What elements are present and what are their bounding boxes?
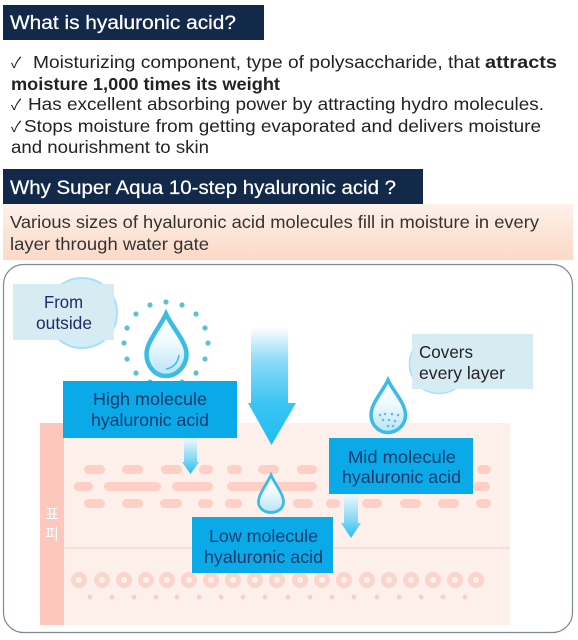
label: mid molecule [329, 438, 473, 494]
label: high molecule: High molecule [93, 389, 207, 409]
dermis dots [88, 595, 467, 599]
heading: what is hyaluronic acid: What is hyaluronic acid? [10, 13, 236, 34]
skin layers [40, 423, 510, 625]
epidermis cell dashes [74, 465, 491, 508]
label: low molecule: hyaluronic acid [204, 547, 323, 567]
text block: definition bullets: attracts [485, 52, 557, 72]
label: low molecule: Low molecule [209, 526, 318, 546]
callout: water gate statement: Various sizes of hyaluronic acid molecules fill in moisture in every [10, 212, 539, 232]
label: high molecule [63, 381, 237, 438]
panel: skin diagram [4, 264, 572, 632]
callout: water gate statement: layer through water gate [10, 234, 209, 254]
arrow: high molecule down [182, 438, 199, 474]
skin layers: 피 [45, 526, 59, 543]
text block: definition bullets: ✓ [11, 119, 22, 136]
text block: definition bullets: Moisturizing component, type of polysaccharide, that [33, 52, 480, 72]
heading: why super aqua [3, 169, 423, 204]
heading: what is hyaluronic acid [3, 5, 264, 40]
arrow: large incoming moisture [248, 327, 296, 445]
arrow: mid molecule down [341, 494, 361, 538]
text block: definition bullets: moisture 1,000 times its weight [11, 74, 280, 94]
icon: mid molecule drop [371, 380, 406, 432]
text block: definition bullets [11, 52, 557, 157]
text block: definition bullets: ✓ [11, 55, 22, 72]
label: high molecule: hyaluronic acid [91, 410, 209, 430]
heading: why super aqua: Why Super Aqua 10-step hyaluronic acid ? [10, 178, 396, 199]
text block: definition bullets: and nourishment to skin [11, 137, 209, 157]
label: covers every layer [412, 334, 533, 389]
circle behind from outside [47, 278, 117, 348]
label: covers every layer: Covers [419, 342, 473, 362]
text block: definition bullets: Has excellent absorbing power by attracting hydro molecules. [28, 94, 544, 114]
label: from outside: outside [36, 313, 92, 333]
circle behind covers [410, 334, 468, 394]
text block: definition bullets: Stops moisture from getting evaporated and delivers moisture [24, 116, 541, 136]
label: mid molecule: hyaluronic acid [342, 467, 461, 487]
label: covers every layer: every layer [419, 363, 505, 383]
text block: definition bullets: ✓ [11, 97, 22, 114]
label: low molecule [192, 517, 333, 573]
label: mid molecule: Mid molecule [348, 447, 456, 467]
icon: large water drop with dots [121, 299, 211, 385]
dermis cell rings [74, 574, 482, 586]
skin layers: 표 [45, 506, 59, 523]
label: from outside: From [44, 292, 83, 312]
label: from outside [13, 284, 114, 340]
callout: water gate statement [3, 204, 573, 260]
icon: low molecule drop [258, 475, 284, 512]
